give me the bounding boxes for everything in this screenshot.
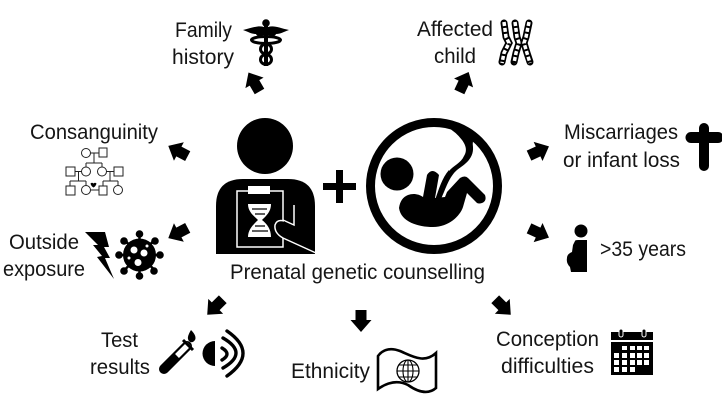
label: miscarriages or infant loss: Miscarriages xyxy=(564,121,678,144)
label: affected child: child xyxy=(434,45,476,68)
label: conception difficulties: Conception xyxy=(496,328,599,351)
label: miscarriages or infant loss: or infant loss xyxy=(563,149,680,172)
arrow: to miscarriages xyxy=(525,137,553,165)
label: conception difficulties xyxy=(496,328,599,378)
label: consanguinity: Consanguinity xyxy=(30,121,158,144)
icon: clinician with DNA clipboard xyxy=(216,118,316,254)
arrow: to family history xyxy=(239,67,269,97)
icon: pedigree chart xyxy=(66,148,123,195)
label: outside exposure: Outside xyxy=(9,231,79,254)
arrow: to over 35 years xyxy=(525,219,553,247)
icon: flag with globe xyxy=(378,349,436,392)
arrow: to test results xyxy=(200,292,230,322)
arrow: to consanguinity xyxy=(163,137,193,165)
label: test results xyxy=(90,329,150,379)
icon: half circle with sound waves xyxy=(202,331,243,376)
icon: lightning bolt xyxy=(85,232,114,279)
label: test results: results xyxy=(90,356,150,379)
arrow: to affected child xyxy=(450,68,478,96)
label: ethnicity: Ethnicity xyxy=(291,360,370,383)
icon: chromosomes xyxy=(502,22,530,63)
label: conception difficulties: difficulties xyxy=(501,355,594,378)
label: outside exposure xyxy=(3,231,85,281)
arrow: to ethnicity xyxy=(350,310,372,332)
icon: cross xyxy=(686,123,722,171)
heading: prenatal genetic counselling: Prenatal genetic counselling xyxy=(230,261,485,284)
label: outside exposure: exposure xyxy=(3,258,85,281)
arrow: to conception difficulties xyxy=(488,292,518,322)
icon: calendar xyxy=(611,329,653,375)
arrow: to outside exposure xyxy=(163,219,193,247)
label: family history: history xyxy=(172,46,234,69)
label: family history: Family xyxy=(175,19,232,42)
label: test results: Test xyxy=(101,329,138,352)
icon: pregnant woman xyxy=(567,224,588,272)
label: miscarriages or infant loss xyxy=(563,121,680,172)
icon: test tube with drop xyxy=(164,330,196,369)
label: affected child: Affected xyxy=(417,18,493,41)
icon: plus sign xyxy=(323,170,356,203)
label: family history xyxy=(172,19,234,69)
label: affected child xyxy=(417,18,493,68)
label: over 35 years: >35 years xyxy=(600,238,686,261)
icon: caduceus xyxy=(243,19,289,66)
icon: virus xyxy=(115,230,164,280)
icon: fetus in circle xyxy=(370,122,498,250)
